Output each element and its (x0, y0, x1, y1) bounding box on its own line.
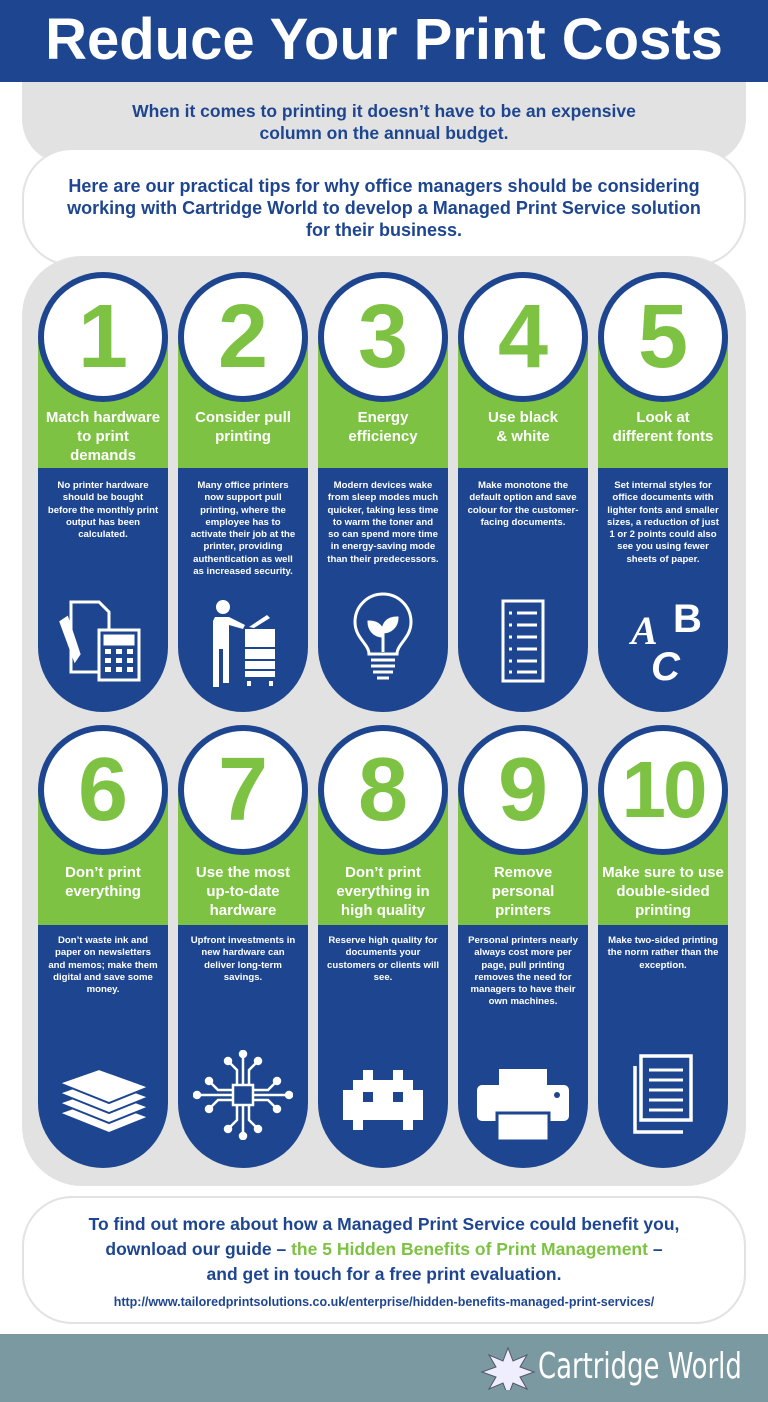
tip 2: Many office printers now support pull printing, where the employee has to activate their job at the printer, providing authentication as well as increased security. (191, 480, 295, 577)
intro banner: column on the annual budget. (260, 123, 508, 143)
tip 3: efficiency (348, 428, 418, 445)
tip 4 (458, 272, 588, 712)
tip 6: Don’t print (65, 864, 141, 881)
tip 3: Modern devices wake from sleep modes much quicker, taking less time to warm the toner and so can spend more time in energy-saving mode than their predecessors. (327, 480, 439, 565)
icon: circuit chip (193, 1050, 293, 1140)
tip 4: 4 (498, 287, 548, 387)
tip 6: Don’t waste ink and paper on newsletters and memos; make them digital and save some money. (48, 935, 158, 995)
tip 6: everything (65, 883, 141, 900)
header title: Reduce Your Print Costs (45, 7, 723, 72)
tip 2: 2 (218, 287, 268, 387)
tip 8 (318, 725, 448, 1168)
tip 5: Look at (636, 409, 690, 426)
tip 10: Make two-sided printing the norm rather than the exception. (608, 935, 718, 971)
tip 10: double-sided (616, 883, 710, 900)
tip 3: Energy (358, 409, 408, 426)
logo: Cartridge World (538, 1346, 742, 1387)
tip 5: different fonts (613, 428, 713, 445)
icon: person at copier (213, 600, 275, 687)
tip 1: 1 (78, 287, 128, 387)
header title (0, 0, 768, 82)
tip 7 (178, 725, 308, 1168)
tip 1: No printer hardware should be bought before the monthly print output has been calculated. (48, 480, 158, 540)
intro text box (22, 148, 746, 266)
icon: pixel invader (343, 1070, 423, 1130)
tip 7: up-to-date (206, 883, 280, 900)
icon: printer (477, 1069, 569, 1140)
tip 2: Consider pull (195, 409, 291, 426)
intro banner: When it comes to printing it doesn’t have to be an expensive (132, 101, 636, 121)
intro banner (22, 82, 746, 164)
tip 9: Personal printers nearly always cost more per page, pull printing removes the need for managers to have their own machines. (468, 935, 578, 1007)
icon: document list (502, 600, 544, 682)
tip 8: high quality (341, 902, 425, 919)
call to action box: http://www.tailoredprintsolutions.co.uk/enterprise/hidden-benefits-managed-print-services/ (114, 1295, 654, 1309)
icon: paper and calculator (59, 600, 140, 682)
tip 3 (318, 272, 448, 712)
tip 8: Reserve high quality for documents your customers or clients will see. (327, 935, 439, 983)
tip 9: 9 (498, 740, 548, 840)
tip 4: & white (496, 428, 550, 445)
tip 8: 8 (358, 740, 408, 840)
icon: ABC letters (628, 597, 702, 682)
tip 6: 6 (78, 740, 128, 840)
tip 4: Use black (488, 409, 558, 426)
call to action box (22, 1196, 746, 1324)
intro text box: for their business. (306, 220, 462, 240)
tip 5: Set internal styles for office documents with lighter fonts and smaller sizes, a reduction of just 1 or 2 points could also see you using fewer sheets of paper. (607, 480, 719, 565)
tip 10: 10 (622, 745, 704, 834)
footer with logo (0, 1334, 768, 1402)
icon: ABC letters: B (673, 597, 702, 641)
tip 7: Use the most (196, 864, 290, 881)
tip 8: Don’t print (345, 864, 421, 881)
icon: paper stack (62, 1070, 146, 1132)
call to action box: To find out more about how a Managed Print Service could benefit you, (89, 1214, 679, 1234)
icon: ABC letters: A (628, 608, 658, 653)
tip 7: 7 (218, 740, 268, 840)
tip 2: printing (215, 428, 271, 445)
icon: double pages (633, 1054, 693, 1134)
tip 5 (598, 272, 728, 712)
tip 7: hardware (210, 902, 276, 919)
tip 6 (38, 725, 168, 1168)
tip 1: demands (70, 447, 136, 464)
tip 10: Make sure to use (602, 864, 724, 881)
tip 9: printers (495, 902, 551, 919)
tip 9 (458, 725, 588, 1168)
tip 9: Remove (494, 864, 552, 881)
tip 1 (38, 272, 168, 712)
tip 2 (178, 272, 308, 712)
intro text box: Here are our practical tips for why office managers should be considering (68, 176, 700, 196)
tip 10: printing (635, 902, 691, 919)
tip 8: everything in (336, 883, 430, 900)
tip 4: Make monotone the default option and save colour for the customer-facing documents. (468, 480, 578, 528)
tip 1: to print (77, 428, 129, 445)
call to action box: and get in touch for a free print evaluation. (207, 1264, 561, 1284)
tip 5: 5 (638, 287, 688, 387)
icon: light bulb (354, 592, 412, 680)
intro text box: working with Cartridge World to develop a Managed Print Service solution (67, 198, 701, 218)
tip 3: 3 (358, 287, 408, 387)
tip 9: personal (492, 883, 554, 900)
tip 7: Upfront investments in new hardware can deliver long-term savings. (191, 935, 295, 983)
call to action box: download our guide – the 5 Hidden Benefits of Print Management – (105, 1239, 663, 1259)
tip 10 (598, 725, 728, 1168)
tip 1: Match hardware (46, 409, 160, 426)
tips panel (22, 256, 746, 1186)
